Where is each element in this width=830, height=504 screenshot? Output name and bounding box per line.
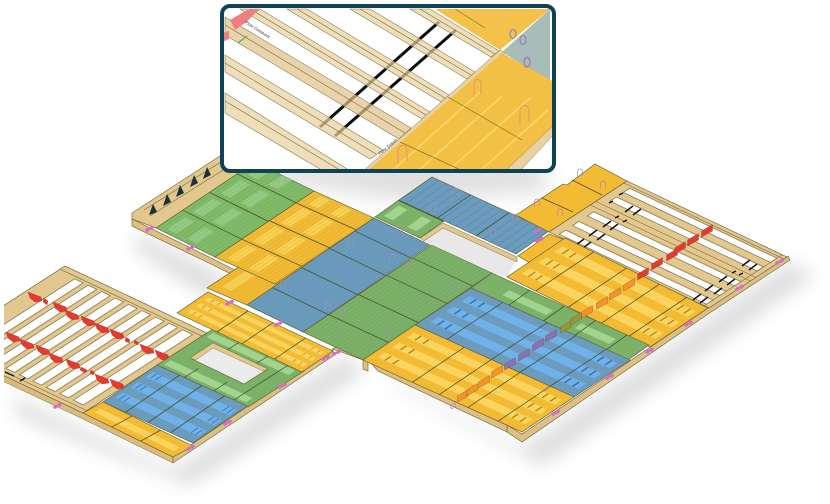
inset white background xyxy=(222,6,554,171)
inset border xyxy=(222,6,554,171)
inset upper yellow panel xyxy=(435,9,550,50)
panel: green strip through right block xyxy=(471,273,649,360)
inset red block xyxy=(230,9,260,30)
orange blocks lower xyxy=(458,366,502,402)
panel: lower yellow cassette field xyxy=(363,325,574,432)
grey floor opening xyxy=(420,223,518,277)
inset detail callout xyxy=(222,6,556,172)
inset black straps xyxy=(320,22,456,136)
panel: upper-left yellow cassettes xyxy=(207,191,374,305)
inset purple loops xyxy=(510,30,530,68)
panel: upper right yellow cassettes xyxy=(516,164,627,232)
panel: lower-left blue cassettes xyxy=(103,365,247,443)
orange blocks upper xyxy=(582,278,634,318)
black connector bars on right frame xyxy=(576,193,757,303)
panel: central green cassettes xyxy=(303,245,492,360)
inset connector label top: Floor Connector xyxy=(244,20,272,40)
inset joist centre lines xyxy=(225,9,495,170)
inset lower yellow panel xyxy=(368,53,556,171)
inset tan corner xyxy=(507,126,552,169)
black triangles xyxy=(149,167,211,215)
blocking row across right block xyxy=(458,224,712,402)
right block side face xyxy=(507,256,790,442)
front block long side face xyxy=(370,362,507,432)
yellow main field xyxy=(215,191,374,284)
upper-left tan truss strip with black triangles xyxy=(132,156,258,228)
panel: upper blue cassettes xyxy=(399,177,549,254)
left frame joists xyxy=(0,266,207,413)
olive blocks xyxy=(560,312,582,333)
panel: upper yellow band of lower-left block xyxy=(177,292,333,372)
drop shadows xyxy=(10,160,815,486)
panel: right yellow cassette field xyxy=(507,234,708,347)
red blocks xyxy=(638,224,712,280)
purple blocks xyxy=(504,330,556,370)
inset joists xyxy=(225,9,499,172)
frame front face xyxy=(4,376,173,464)
inset hairpin marks xyxy=(398,79,529,163)
inset connector label bottom: Floor Gusset xyxy=(377,137,399,156)
lower-left block side face xyxy=(173,349,333,463)
marker outline below front edge xyxy=(450,403,456,409)
center join side face xyxy=(333,345,368,371)
hairpin connector icons xyxy=(280,169,606,336)
inset green connector xyxy=(238,36,247,43)
left open joist frame xyxy=(0,266,207,463)
panel: lower blue cassette field xyxy=(415,288,630,397)
red blocking rows xyxy=(6,292,169,389)
panel: lower-left yellow strip xyxy=(83,402,193,457)
upper-left block side face xyxy=(132,219,235,276)
panel: lower-left green cassette with opening xyxy=(157,329,304,407)
inset yellow panel light stripes xyxy=(392,92,548,171)
magenta connector markers xyxy=(53,226,784,451)
inset panel seams xyxy=(400,9,522,171)
opening inner wall xyxy=(420,223,517,262)
panel: small green cassette by opening xyxy=(375,200,444,238)
yellow lower tongue xyxy=(207,243,315,305)
panel: central blue cassettes xyxy=(247,218,430,332)
window inner wall xyxy=(190,343,268,371)
panel: right open joist frame xyxy=(549,181,787,308)
inset small red block xyxy=(224,31,229,42)
inset tan edge beam xyxy=(363,50,505,171)
inset blue panel xyxy=(502,9,550,82)
panel: upper-left green cassettes xyxy=(156,162,314,257)
window opening xyxy=(190,343,268,384)
black connector bars xyxy=(5,372,25,381)
